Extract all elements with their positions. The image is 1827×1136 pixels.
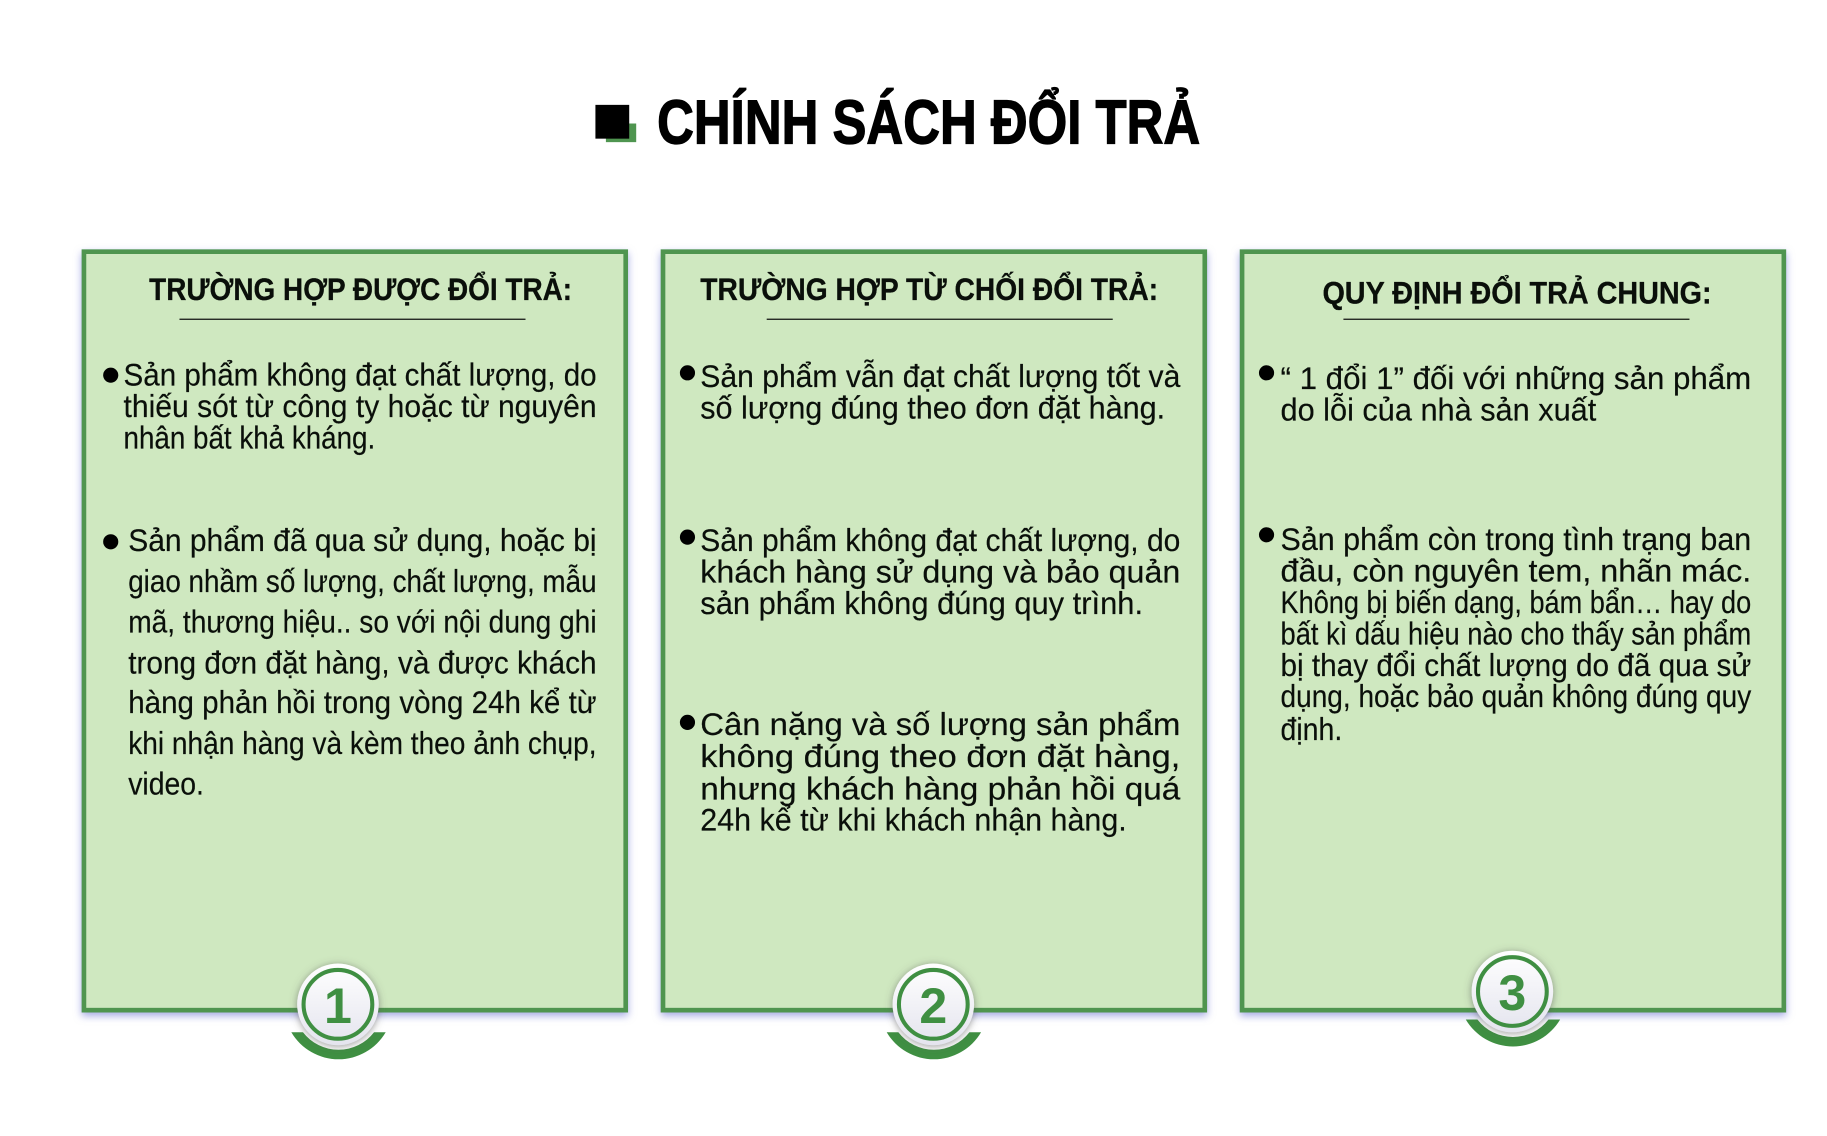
bullet 3: không đúng theo đơn đặt hàng, [700, 739, 1180, 774]
bullet 2 [1259, 522, 1751, 747]
bullet 1: nhân bất khả kháng. [124, 421, 375, 456]
bullet 3 [680, 707, 1181, 838]
number badge 2 [887, 964, 981, 1059]
number badge 1 [291, 964, 386, 1059]
bullet 1 [1259, 361, 1751, 428]
bullet 2: video. [128, 767, 204, 802]
bullet 1: Sản phẩm vẫn đạt chất lượng tốt và [700, 359, 1181, 394]
bullet 2: bất kì dấu hiệu nào cho thấy sản phẩm [1281, 616, 1751, 651]
bullet 2 [680, 523, 1180, 621]
bullet 2: giao nhầm số lượng, chất lượng, mẫu [128, 564, 597, 599]
bullet 2: Sản phẩm đã qua sử dụng, hoặc bị [128, 523, 597, 558]
bullet 1: số lượng đúng theo đơn đặt hàng. [700, 390, 1165, 425]
heading: QUY ĐỊNH ĐỔI TRẢ CHUNG: [1322, 275, 1712, 311]
bullet 2: định. [1281, 712, 1342, 747]
heading: TRƯỜNG HỢP TỪ CHỐI ĐỔI TRẢ: [700, 271, 1158, 307]
bullet 2: đầu, còn nguyên tem, nhãn mác. [1281, 553, 1751, 588]
bullet 2: sản phẩm không đúng quy trình. [700, 586, 1143, 621]
bullet 1 [103, 358, 597, 456]
icon: title square [595, 105, 636, 142]
title [595, 87, 1200, 157]
bullet 2: trong đơn đặt hàng, và được khách [128, 645, 597, 680]
title text: CHÍNH SÁCH ĐỔI TRẢ [657, 87, 1200, 157]
number badge 1: 1 [324, 978, 352, 1034]
bullet 2: khi nhận hàng và kèm theo ảnh chụp, [128, 726, 597, 761]
bullet 3: Cân nặng và số lượng sản phẩm [700, 707, 1180, 742]
bullet 2: hàng phản hồi trong vòng 24h kể từ [128, 685, 597, 720]
bullet 2: Sản phẩm không đạt chất lượng, do [700, 523, 1180, 558]
bullet 1: do lỗi của nhà sản xuất [1281, 393, 1597, 428]
bullet 2: mã, thương hiệu.. so với nội dung ghi [128, 605, 597, 640]
bullet 2: khách hàng sử dụng và bảo quản [700, 555, 1180, 590]
bullet 3: nhưng khách hàng phản hồi quá [700, 771, 1181, 806]
panel: trường hợp từ chối đổi trả [663, 252, 1205, 1059]
bullet 2: bị thay đổi chất lượng do đã qua sử [1281, 648, 1751, 683]
card background [663, 252, 1205, 1010]
bullet 1: thiếu sót từ công ty hoặc từ nguyên [124, 389, 597, 424]
bullet 2: Không bị biến dạng, bám bẩn… hay do [1281, 585, 1751, 620]
panel: quy định đổi trả chung [1242, 252, 1784, 1046]
card background [84, 252, 626, 1010]
bullet 1: “ 1 đổi 1” đối với những sản phẩm [1281, 361, 1751, 396]
bullet 3: 24h kể từ khi khách nhận hàng. [700, 803, 1127, 838]
number badge 3: 3 [1498, 965, 1526, 1021]
bullet 1 [680, 359, 1181, 425]
heading: TRƯỜNG HỢP ĐƯỢC ĐỔI TRẢ: [149, 271, 572, 307]
number badge 2: 2 [919, 978, 947, 1034]
card background [1242, 252, 1784, 1010]
bullet 2 [103, 523, 597, 802]
number badge 3 [1466, 951, 1560, 1046]
bullet 2: Sản phẩm còn trong tình trạng ban [1281, 522, 1751, 557]
bullet 2: dụng, hoặc bảo quản không đúng quy [1281, 679, 1751, 714]
bullet 1: Sản phẩm không đạt chất lượng, do [124, 358, 597, 393]
panel: trường hợp được đổi trả [84, 252, 626, 1059]
